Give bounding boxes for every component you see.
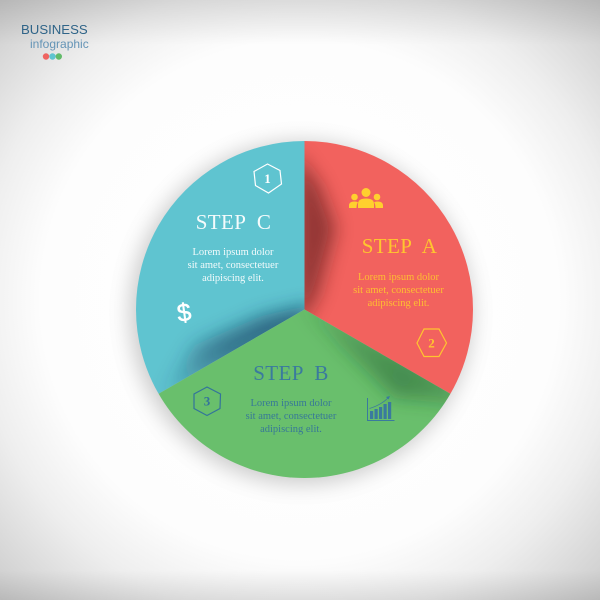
heading step A: STEP A — [362, 234, 438, 258]
panel: step B — [159, 302, 462, 478]
body text C: adipiscing elit. — [202, 273, 264, 284]
body text C: sit amet, consectetuer — [188, 260, 279, 271]
body text A: Lorem ipsum dolor — [358, 272, 440, 283]
hexagon 1 — [254, 164, 282, 193]
body text C: Lorem ipsum dolor — [192, 247, 274, 258]
body text B: Lorem ipsum dolor — [250, 398, 332, 409]
body text A: adipiscing elit. — [368, 298, 429, 309]
sector C inner shadow — [166, 294, 304, 388]
panel: step C — [136, 141, 315, 400]
logo subheading: infographic — [30, 37, 89, 51]
icon: people — [349, 188, 383, 208]
hexagon 3 — [194, 387, 220, 416]
hexagon 1: 1 — [264, 171, 271, 186]
logo: business infographic — [21, 22, 89, 60]
hexagon 3: 3 — [204, 394, 211, 408]
heading step C: STEP C — [196, 210, 271, 234]
sector B — [159, 310, 450, 478]
sector B inner shadow — [316, 316, 450, 410]
hexagon 2: 2 — [428, 336, 435, 350]
body text B: sit amet, consectetuer — [246, 411, 337, 422]
sector A inner shadow — [296, 152, 336, 320]
logo dots — [43, 53, 62, 60]
logo heading: BUSINESS — [21, 22, 88, 37]
icon: bar chart — [367, 396, 394, 421]
sector C — [136, 141, 304, 394]
pie chart — [136, 141, 473, 478]
body text B: adipiscing elit. — [260, 424, 322, 435]
icon: dollar: $ — [175, 298, 193, 328]
sector A — [304, 141, 473, 394]
heading step B: STEP B — [253, 361, 329, 385]
drop shadow of pie — [130, 142, 472, 484]
body text A: sit amet, consectetuer — [353, 285, 444, 296]
hexagon 2 — [417, 329, 446, 356]
panel: step A — [296, 141, 473, 394]
